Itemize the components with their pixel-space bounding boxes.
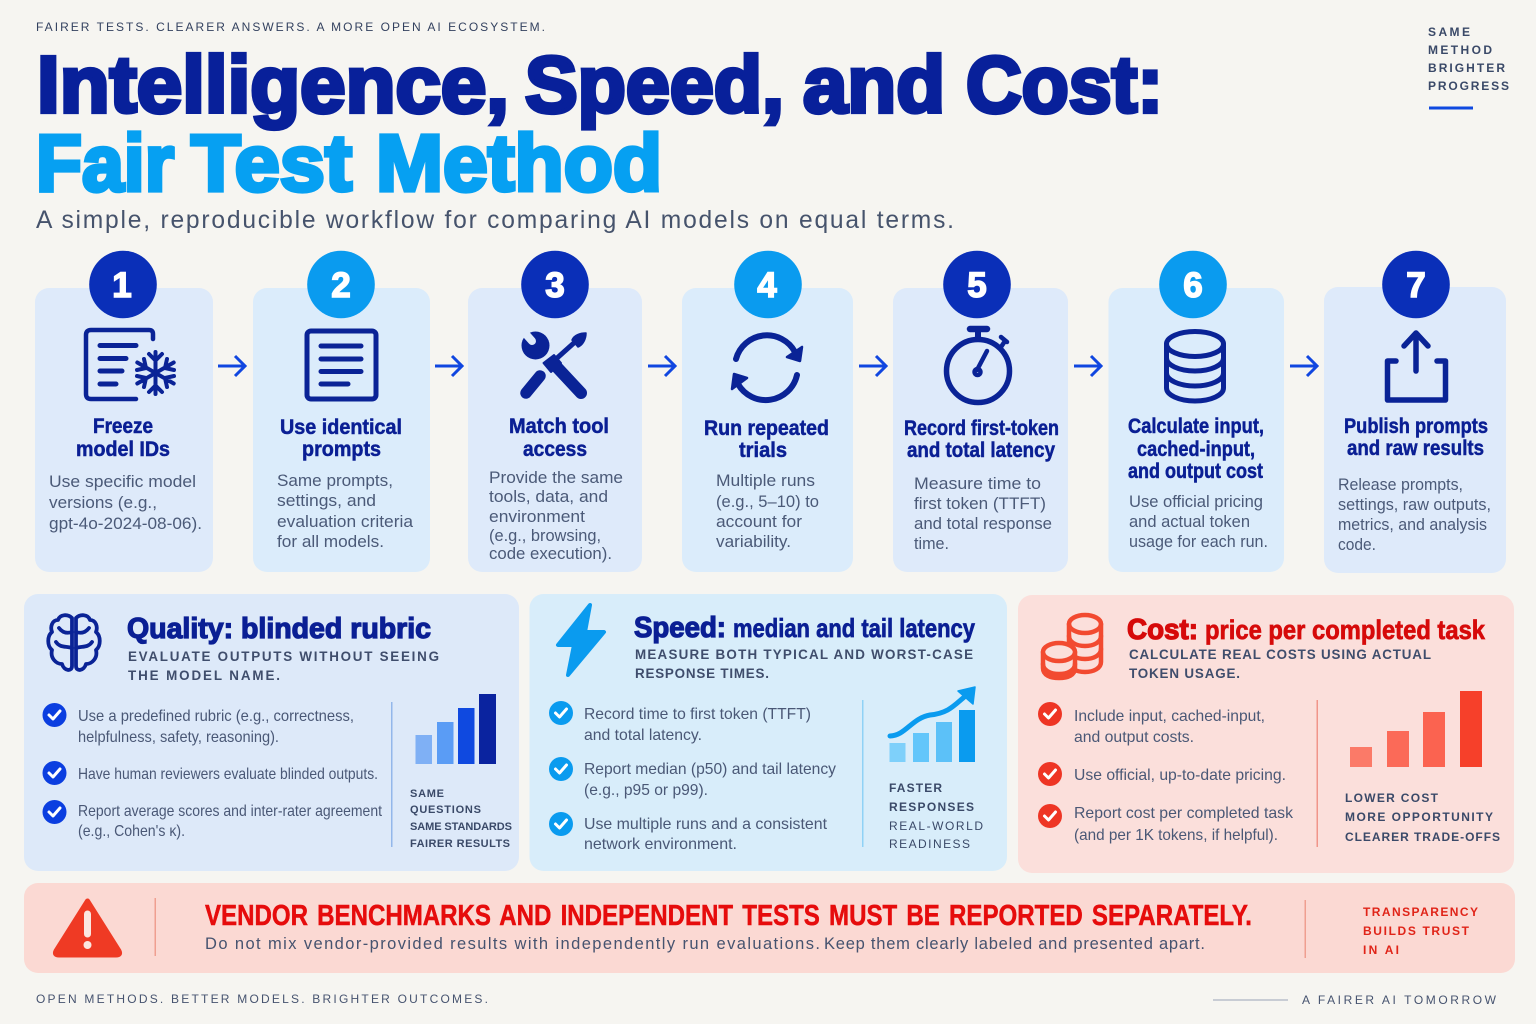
step 4: run repeated trials: account for — [716, 513, 803, 531]
panel: speed — [530, 594, 1007, 871]
step 3: match tool access: (e.g., browsing, — [489, 527, 601, 545]
subheading: MEASURE BOTH TYPICAL AND WORST-CASE — [635, 647, 973, 662]
side note: QUESTIONS — [410, 804, 481, 816]
subheading — [1129, 647, 1431, 681]
step 3: match tool access: 3 — [545, 266, 565, 305]
panel: quality — [24, 594, 519, 871]
subheading: CALCULATE REAL COSTS USING ACTUAL — [1129, 647, 1431, 662]
bar chart — [1350, 691, 1482, 767]
checklist — [1038, 702, 1294, 844]
title: Speed, — [525, 40, 784, 129]
icon: warning triangle — [55, 901, 120, 955]
bar chart with trend arrow — [890, 687, 975, 762]
side note: SAME STANDARDS — [410, 821, 512, 833]
title: Fair — [36, 118, 174, 208]
step 5: record latency: and total latency — [907, 439, 1055, 462]
step 3: match tool access: environment — [489, 508, 586, 526]
step 6: calculate cost: cached-input, — [1137, 438, 1255, 461]
icon: wrench and screwdriver — [522, 332, 586, 393]
warning banner — [24, 883, 1515, 973]
checklist: Use a predefined rubric (e.g., correctness, — [78, 708, 354, 725]
step 6: calculate cost — [1108, 251, 1284, 572]
subheading: EVALUATE OUTPUTS WITHOUT SEEING — [128, 649, 439, 664]
step 6: calculate cost: Use official pricing — [1129, 493, 1263, 511]
heading: price per completed task — [1205, 615, 1486, 645]
step 4: run repeated trials — [682, 251, 853, 572]
banner text: Do not mix vendor-provided results with independently run evaluations. — [205, 935, 820, 953]
step 6: calculate cost: usage for each run. — [1129, 533, 1268, 551]
icon: lightning bolt — [558, 605, 604, 675]
step 3: match tool access: Provide the same — [489, 469, 623, 487]
step 7: publish results: Publish prompts — [1344, 415, 1488, 438]
icon: document with snowflake — [86, 330, 174, 399]
step 5: record latency: 5 — [967, 266, 987, 305]
step 7: publish results — [1324, 251, 1506, 573]
icon: stopwatch — [946, 329, 1010, 402]
step 6: calculate cost: and output cost — [1128, 460, 1263, 483]
checklist: Use official, up-to-date pricing. — [1074, 767, 1286, 784]
icon: document — [307, 331, 376, 399]
side note: LOWER COST — [1345, 791, 1439, 805]
arrow 5 to 6 — [1074, 356, 1101, 376]
step 6: calculate cost: Calculate input, — [1128, 415, 1264, 438]
corner note — [1428, 25, 1509, 110]
heading — [1127, 614, 1486, 646]
side note — [1345, 791, 1500, 844]
bar chart — [416, 694, 496, 764]
banner note: IN AI — [1363, 943, 1399, 957]
arrow 3 to 4 — [648, 356, 675, 376]
step 2: use identical prompts: settings, and — [277, 492, 376, 510]
title — [36, 40, 1163, 208]
side note: MORE OPPORTUNITY — [1345, 810, 1493, 824]
step 5: record latency — [893, 251, 1068, 572]
step 2: use identical prompts: evaluation criteria — [277, 513, 413, 531]
step 3: match tool access: tools, data, and — [489, 488, 608, 506]
checklist — [42, 703, 382, 840]
step 1: freeze model IDs: model IDs — [76, 438, 170, 461]
step 4: run repeated trials: variability. — [716, 533, 791, 551]
heading — [634, 612, 975, 644]
icon: brain — [48, 615, 100, 670]
arrow 1 to 2 — [218, 356, 245, 376]
side note: CLEARER TRADE-OFFS — [1345, 830, 1500, 844]
step 3: match tool access — [468, 251, 642, 572]
step 2: use identical prompts: 2 — [331, 266, 351, 305]
step 4: run repeated trials: trials — [739, 439, 787, 462]
step 6: calculate cost: 6 — [1183, 266, 1203, 305]
heading: Cost: — [1127, 614, 1198, 646]
checklist: helpfulness, safety, reasoning). — [78, 729, 279, 746]
footer right: A FAIRER AI TOMORROW — [1302, 993, 1497, 1007]
step 5: record latency: time. — [914, 535, 949, 553]
step 2: use identical prompts: for all models. — [277, 533, 384, 551]
title: Intelligence, — [37, 40, 509, 129]
heading: Quality: blinded rubric — [127, 613, 431, 645]
corner note: PROGRESS — [1428, 79, 1509, 93]
subheading: RESPONSE TIMES. — [635, 666, 769, 681]
arrow 2 to 3 — [435, 356, 462, 376]
checklist: and output costs. — [1074, 729, 1194, 746]
step 2: use identical prompts: Same prompts, — [277, 472, 393, 490]
title: Method — [376, 118, 662, 208]
step 5: record latency: and total response — [914, 515, 1052, 533]
subtitle: A simple, reproducible workflow for comparing AI models on equal terms. — [36, 207, 954, 234]
step 1: freeze model IDs — [35, 251, 213, 572]
step 5: record latency: Measure time to — [914, 475, 1041, 493]
step 4: run repeated trials: 4 — [757, 266, 777, 305]
footer left: OPEN METHODS. BETTER MODELS. BRIGHTER OUTCOMES. — [36, 992, 488, 1006]
checklist — [549, 701, 836, 853]
title: and — [803, 40, 945, 129]
checklist: Record time to first token (TTFT) — [584, 706, 811, 723]
side note: READINESS — [889, 837, 970, 851]
step 7: publish results: settings, raw outputs, — [1338, 496, 1491, 514]
icon: database — [1166, 332, 1224, 401]
step 4: run repeated trials: (e.g., 5–10) to — [716, 493, 819, 511]
corner note: METHOD — [1428, 43, 1492, 57]
side note: SAME — [410, 788, 444, 800]
side note — [410, 788, 512, 850]
step 6: calculate cost: and actual token — [1129, 513, 1250, 531]
step 1: freeze model IDs: versions (e.g., — [49, 494, 157, 512]
side note: REAL-WORLD — [889, 819, 983, 833]
step 2: use identical prompts: Use identical — [280, 416, 402, 439]
checklist: Use multiple runs and a consistent — [584, 816, 828, 833]
banner heading: VENDOR BENCHMARKS AND INDEPENDENT TESTS MUST BE REPORTED SEPARATELY. — [205, 900, 1252, 932]
step 7: publish results: and raw results — [1347, 437, 1484, 460]
checklist: and total latency. — [584, 727, 702, 744]
heading: median and tail latency — [733, 613, 975, 643]
step 3: match tool access: code execution). — [489, 545, 612, 563]
banner note — [1363, 905, 1478, 957]
step 7: publish results: 7 — [1406, 266, 1426, 305]
checklist: Report average scores and inter-rater agreement — [78, 803, 382, 820]
subheading: TOKEN USAGE. — [1129, 666, 1240, 681]
side note: RESPONSES — [889, 800, 974, 814]
checklist: network environment. — [584, 836, 737, 853]
checklist: Have human reviewers evaluate blinded outputs. — [78, 766, 378, 783]
step 1: freeze model IDs: 1 — [112, 266, 132, 305]
step 4: run repeated trials: Run repeated — [704, 417, 829, 440]
step 7: publish results: Release prompts, — [1338, 476, 1463, 494]
icon: coin stacks — [1043, 615, 1101, 678]
heading: Speed: — [634, 612, 726, 644]
step 1: freeze model IDs: Use specific model — [49, 473, 196, 491]
panel: cost — [1018, 595, 1514, 873]
step 3: match tool access: Match tool — [509, 415, 609, 438]
side note — [889, 781, 983, 851]
side note: FAIRER RESULTS — [410, 838, 510, 850]
checklist: Include input, cached-input, — [1074, 708, 1265, 725]
side note: FASTER — [889, 781, 942, 795]
title: Test — [191, 118, 352, 208]
banner note: BUILDS TRUST — [1363, 924, 1470, 938]
subheading — [128, 649, 439, 683]
banner text: Keep them clearly labeled and presented apart. — [824, 935, 1205, 953]
eyebrow tagline: FAIRER TESTS. CLEARER ANSWERS. A MORE OPEN AI ECOSYSTEM. — [36, 20, 545, 34]
checklist: Report cost per completed task — [1074, 805, 1294, 822]
step 5: record latency: first token (TTFT) — [914, 495, 1046, 513]
icon: refresh arrows — [732, 335, 802, 400]
arrow 4 to 5 — [859, 356, 886, 376]
checklist: (e.g., Cohen's κ). — [78, 823, 185, 840]
step 4: run repeated trials: Multiple runs — [716, 472, 815, 490]
banner text — [205, 935, 1205, 953]
icon: share upload — [1388, 333, 1446, 400]
step 7: publish results: metrics, and analysis — [1338, 516, 1487, 534]
arrow 6 to 7 — [1290, 356, 1317, 376]
corner note: BRIGHTER — [1428, 61, 1505, 75]
corner note: SAME — [1428, 25, 1470, 39]
step 2: use identical prompts — [253, 251, 430, 572]
step 1: freeze model IDs: gpt-4o-2024-08-06). — [49, 515, 202, 533]
step 3: match tool access: access — [523, 438, 587, 461]
step 1: freeze model IDs: Freeze — [93, 415, 153, 438]
checklist: (and per 1K tokens, if helpful). — [1074, 827, 1278, 844]
title: Cost: — [966, 40, 1163, 129]
checklist: (e.g., p95 or p99). — [584, 782, 708, 799]
step 7: publish results: code. — [1338, 536, 1376, 554]
step 5: record latency: Record first-token — [904, 417, 1059, 440]
banner note: TRANSPARENCY — [1363, 905, 1478, 919]
subheading — [635, 647, 973, 681]
step 2: use identical prompts: prompts — [302, 438, 381, 461]
checklist: Report median (p50) and tail latency — [584, 761, 836, 778]
subheading: THE MODEL NAME. — [128, 668, 280, 683]
